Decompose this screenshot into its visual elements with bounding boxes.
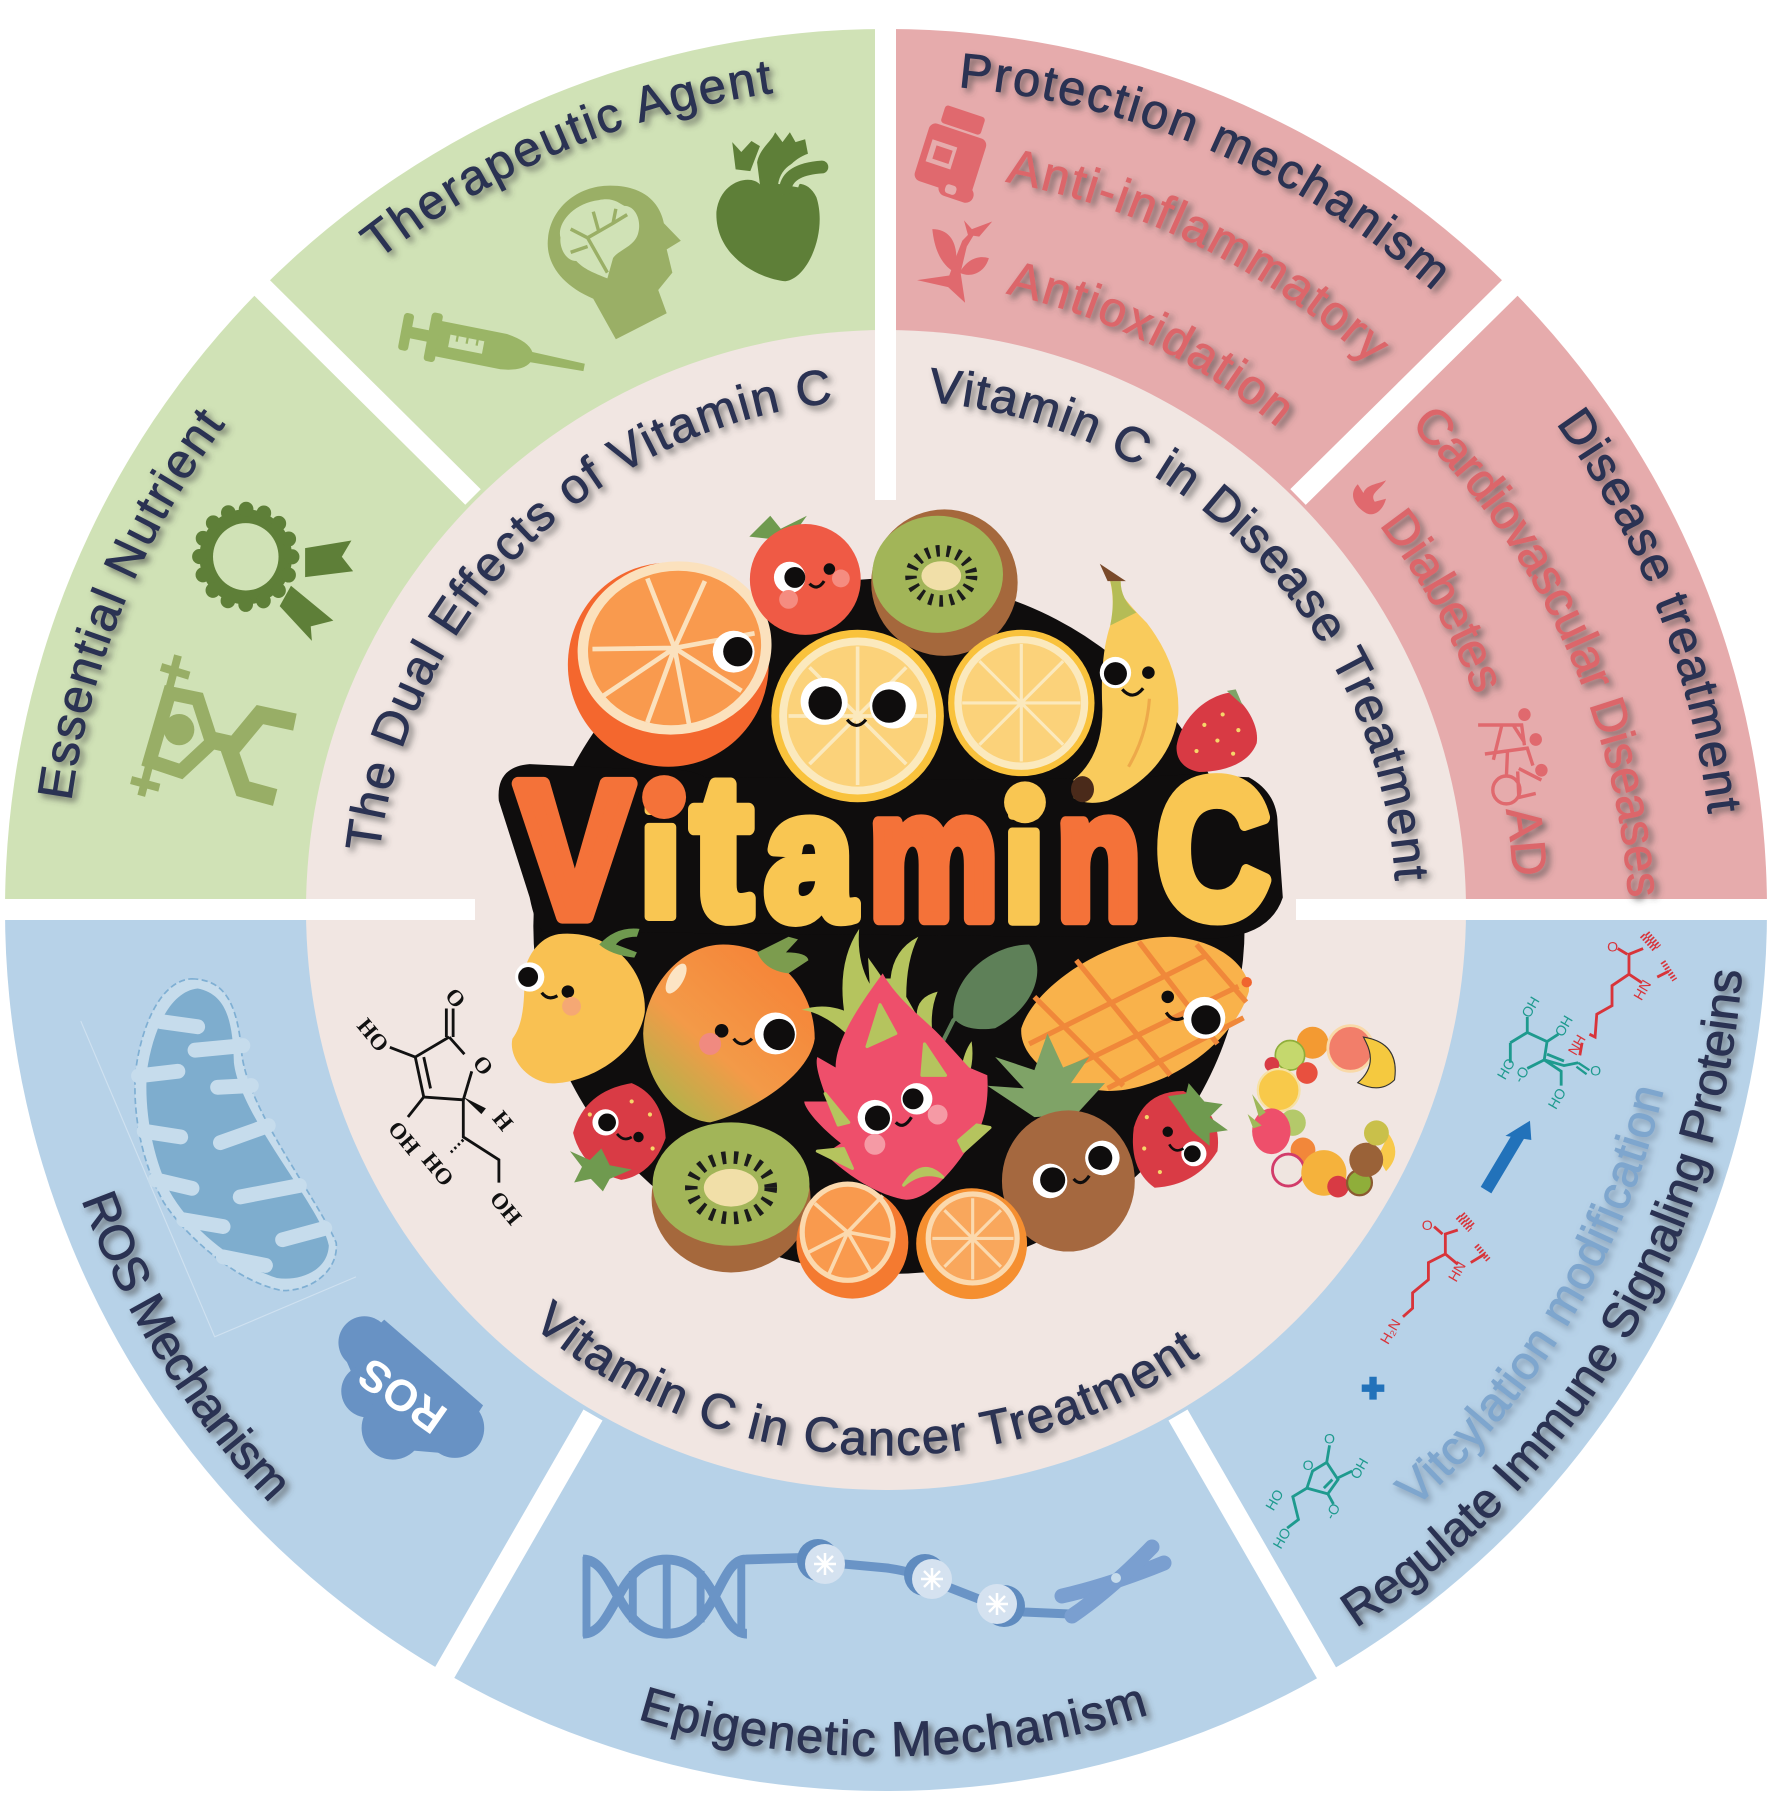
- label: Cardiovascular Diseases: Cardiovascular Diseases: [1417, 409, 1662, 904]
- icon: ascorbic acid structure: O: [468, 1050, 498, 1080]
- illustration: central Vitamin C fruit logo: [499, 509, 1283, 1299]
- illustration: lysine plus vitamin C reaction: O: [1303, 1458, 1314, 1474]
- illustration: lysine plus vitamin C reaction: OH: [1552, 1013, 1577, 1040]
- fruit: dragon fruit: [802, 929, 990, 1200]
- fruit: big orange slice: [564, 546, 785, 767]
- word: VitaminC: i: [637, 764, 684, 954]
- heading: Disease treatment: Disease treatment: [1558, 406, 1746, 821]
- illustration: lysine plus vitamin C reaction: O: [1607, 939, 1618, 955]
- icon: medicine bottle and pill: [913, 102, 994, 205]
- illustration: lysine plus vitamin C reaction: O: [1324, 1432, 1335, 1448]
- illustration: lysine plus vitamin C reaction: HO: [1263, 1487, 1287, 1514]
- panel: green nutrient and therapeutic sectors: [5, 29, 886, 910]
- fruit: lower right orange half: [916, 1188, 1027, 1299]
- illustration: lysine plus vitamin C reaction: [1263, 933, 1675, 1552]
- heading: ROS Mechanism: ROS Mechanism: [82, 1190, 293, 1508]
- label: Antioxidation: Antioxidation: [1005, 263, 1298, 432]
- fruit: yellow mango with grid: [1021, 937, 1252, 1091]
- label: Vitcylation modification: Vitcylation modification: [1392, 1088, 1668, 1506]
- illustration: lysine plus vitamin C reaction: OH: [1348, 1456, 1372, 1482]
- illustration: lysine plus vitamin C reaction: HN: [1631, 978, 1655, 1003]
- illustration: lysine plus vitamin C reaction: HO: [1270, 1525, 1295, 1552]
- fruit: top kiwi: [871, 509, 1018, 656]
- heading: Essential Nutrient: Essential Nutrient: [38, 409, 232, 806]
- fruit: orange mango: [643, 937, 815, 1122]
- heading: Epigenetic Mechanism: Epigenetic Mechanism: [640, 1687, 1154, 1765]
- icon: nucleosome 1: [797, 1539, 845, 1584]
- illustration: lysine plus vitamin C reaction: H₂N: [1378, 1317, 1404, 1347]
- icon: ascorbic acid structure: HO: [352, 1013, 394, 1057]
- illustration: lysine plus vitamin C reaction: NH: [1566, 1032, 1589, 1058]
- fruit: lower right strawberry: [1133, 1083, 1228, 1188]
- heading: Vitamin C in Cancer Treatment: Vitamin C in Cancer Treatment: [542, 1298, 1207, 1464]
- label: Anti-inflammatory: Anti-inflammatory: [1004, 150, 1395, 370]
- fruit: leaf: [943, 945, 1037, 1041]
- fruit: lower left orange half: [796, 1181, 908, 1299]
- blue arrow: [1486, 1135, 1519, 1190]
- word: VitaminC: V: [517, 743, 633, 959]
- icon: ROS cloud: [338, 1316, 484, 1460]
- illustration: lysine plus vitamin C reaction: -O: [1511, 1064, 1533, 1086]
- illustration: lysine plus vitamin C reaction: HO: [1546, 1086, 1570, 1112]
- icon: small fruit letter C: [1248, 1026, 1395, 1197]
- illustration: mitochondrion: [81, 979, 356, 1337]
- word: VitaminC: m: [869, 756, 998, 957]
- product molecule red: [1580, 949, 1669, 1055]
- icon: flame: [1353, 480, 1386, 514]
- illustration: lysine plus vitamin C reaction: OH: [1519, 994, 1543, 1021]
- fruit: yellow mango: [512, 929, 645, 1083]
- word: VitaminC: t: [692, 733, 752, 961]
- black word outline: [499, 764, 1283, 938]
- label: AD: AD: [1506, 809, 1554, 882]
- illustration: lysine plus vitamin C reaction: O: [1590, 1063, 1601, 1079]
- panel: inner ring: [306, 330, 1466, 1490]
- icon: syringe: [397, 307, 589, 392]
- fruit: brown kiwi with pineapple leaves: [987, 1033, 1135, 1252]
- illustration: lysine plus vitamin C reaction: -O: [1323, 1501, 1344, 1523]
- icon: plant: [917, 220, 992, 303]
- fruit: lower kiwi: [652, 1122, 811, 1272]
- panel: blue cancer sectors: [5, 910, 1767, 1791]
- red lysine: [1403, 1227, 1485, 1317]
- word: VitaminC: C: [1156, 739, 1270, 959]
- fruit: lower left strawberry: [570, 1083, 666, 1191]
- word: VitaminC: a: [765, 756, 855, 957]
- icon: weightlifter: [131, 655, 295, 798]
- icon: ROS cloud: ROS: [349, 1348, 455, 1443]
- illustration: lysine plus vitamin C reaction: HO: [1495, 1056, 1519, 1083]
- black background circle: [533, 578, 1245, 1274]
- fruit: banana: [1071, 564, 1178, 803]
- word: VitaminC: i: [1000, 769, 1048, 959]
- fruit: right lemon slice: [948, 630, 1095, 776]
- icon: nucleosome 3: [977, 1584, 1025, 1627]
- label: Diabetes: Diabetes: [1381, 508, 1504, 700]
- icon: head with brain: [548, 186, 681, 339]
- icon: ascorbic acid structure: HO: [417, 1148, 459, 1191]
- heading: Regulate Immune Signaling Proteins: Regulate Immune Signaling Proteins: [1340, 970, 1750, 1633]
- icon: award badge: [199, 509, 353, 641]
- icon: heart: [716, 132, 822, 281]
- fruit: left lemon slice: [771, 630, 944, 802]
- product molecule teal: [1510, 1017, 1578, 1086]
- fruit: red tomato: [749, 516, 861, 635]
- panel: pink disease sectors: [886, 29, 1767, 910]
- icon: nucleosome 2: [904, 1554, 952, 1599]
- icon: ascorbic acid structure: OH: [485, 1186, 527, 1230]
- heading: The Dual Effects of Vitamin C: The Dual Effects of Vitamin C: [345, 370, 838, 854]
- icon: ascorbic acid structure: [352, 983, 527, 1230]
- dot of first i: [642, 775, 686, 819]
- heading: Protection mechanism: Protection mechanism: [962, 53, 1454, 296]
- word: VitaminC: n: [1056, 756, 1141, 957]
- illustration: DNA to chromosome: [583, 1547, 1164, 1637]
- heading: Vitamin C in Disease Treatment: Vitamin C in Disease Treatment: [931, 368, 1434, 888]
- illustration: lysine plus vitamin C reaction: O: [1422, 1218, 1433, 1234]
- dot of second i: [1004, 781, 1046, 823]
- plus sign: [1362, 1377, 1384, 1400]
- word: VitaminC: [517, 733, 1270, 961]
- icon: ascorbic acid structure: O: [440, 983, 471, 1013]
- icon: ascorbic acid structure: OH: [383, 1116, 425, 1160]
- fruit: right strawberry: [1177, 689, 1257, 772]
- icon: ascorbic acid structure: H: [488, 1106, 518, 1136]
- heading: Therapeutic Agent: Therapeutic Agent: [358, 62, 780, 260]
- teal molecule: [1287, 1445, 1352, 1528]
- illustration: lysine plus vitamin C reaction: HN: [1446, 1259, 1470, 1285]
- icon: people group: [1478, 710, 1546, 804]
